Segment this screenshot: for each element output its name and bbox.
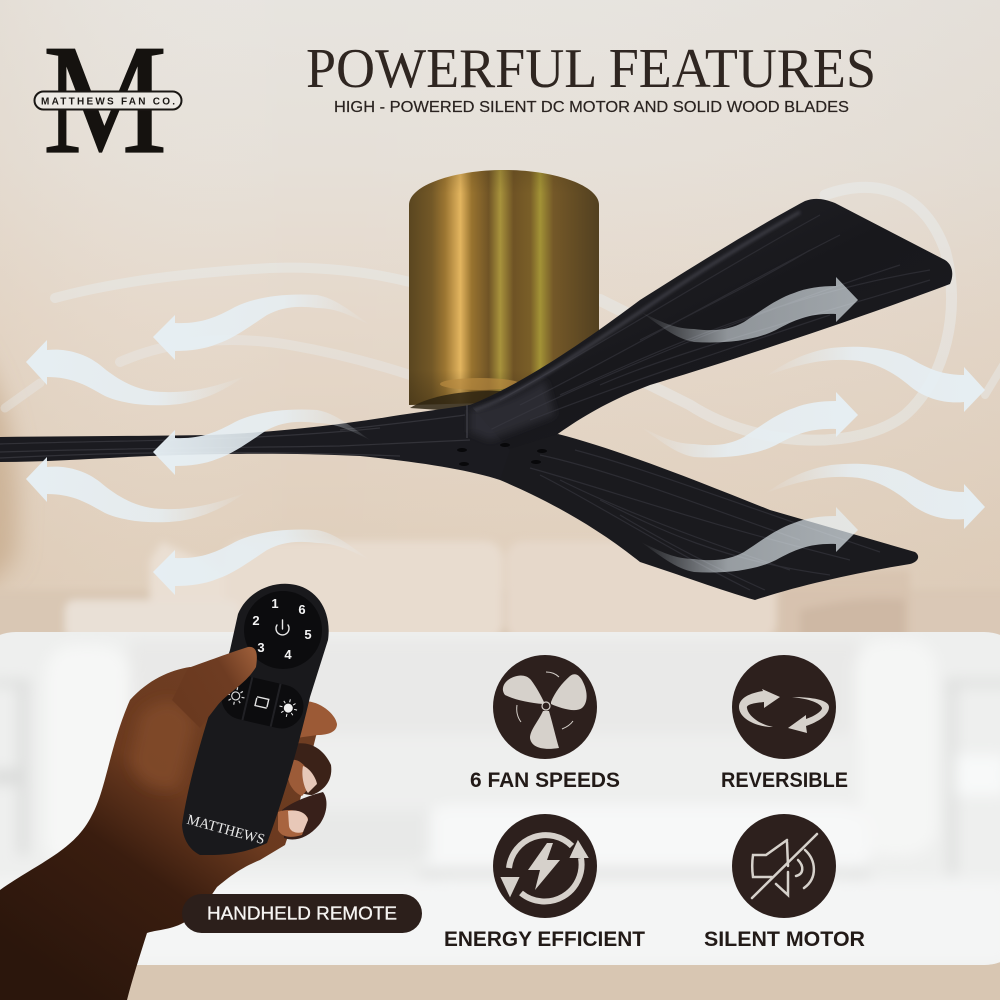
label: SILENT MOTOR <box>704 927 865 951</box>
index finger <box>296 701 337 738</box>
arrow: centre-left over blade <box>153 410 370 475</box>
airflow arrows: left side <box>26 294 370 595</box>
logo: Matthews Fan Co. monogram: MATTHEWS FAN CO. <box>41 96 175 108</box>
label: ENERGY EFFICIENT <box>444 927 645 951</box>
airflow arrows: right side <box>641 277 985 572</box>
dial <box>244 591 322 669</box>
button icon: reverse <box>255 697 269 708</box>
blade: left <box>0 405 510 480</box>
dial numbers: 3 <box>257 640 265 655</box>
arrow: centre-right <box>641 392 858 458</box>
subtitle: HIGH - POWERED SILENT DC MOTOR AND SOLID WOOD BLADES <box>334 99 849 116</box>
dial numbers: 5 <box>304 627 312 642</box>
label: REVERSIBLE <box>721 768 848 792</box>
middle finger <box>286 743 331 795</box>
hand holding remote <box>0 667 337 1000</box>
dial numbers: 1 <box>271 596 279 611</box>
ring finger tip and nail <box>278 810 308 837</box>
arrow: upper centre-left <box>153 294 370 360</box>
panel: features backdrop <box>0 632 1000 965</box>
pill: handheld remote <box>182 894 422 933</box>
dial numbers: 2 <box>252 613 260 628</box>
dial numbers <box>252 596 312 662</box>
icon: muted speaker <box>732 814 836 918</box>
feature: silent motor <box>704 814 865 951</box>
logo: Matthews Fan Co. monogram: M <box>43 12 167 186</box>
arrow: on lower blade <box>641 507 858 572</box>
remote control <box>182 584 329 855</box>
ceiling fan <box>0 170 952 600</box>
dial numbers: 6 <box>298 602 306 617</box>
middle finger tip and nail <box>287 760 317 796</box>
background: floor strip <box>0 950 1000 1000</box>
icon: fan <box>493 655 597 759</box>
dial numbers: 4 <box>284 647 292 662</box>
arrow: far left lower <box>26 457 245 522</box>
arrow: far right lower <box>766 464 985 529</box>
button icon: light on <box>278 697 299 719</box>
motor canopy: brushed brass <box>409 170 599 405</box>
feature: energy efficient <box>444 814 645 951</box>
arrow: on upper blade <box>641 277 858 342</box>
pill: handheld remote: HANDHELD REMOTE <box>207 902 397 924</box>
arrow: far left upper <box>26 340 245 405</box>
faint air swirls behind fan <box>5 187 1000 440</box>
icon: bolt in cycle <box>493 814 597 918</box>
blade: upper right <box>400 199 952 470</box>
arm and palm <box>0 667 320 1000</box>
button icon: light <box>225 685 246 707</box>
knuckle highlight <box>130 701 195 789</box>
icon: rotation arrows <box>732 655 836 759</box>
remote body <box>182 584 329 855</box>
function buttons <box>217 671 308 733</box>
feature: reversible <box>721 655 848 792</box>
ring finger <box>282 792 326 839</box>
feature: 6 fan speeds <box>470 655 620 792</box>
title: POWERFUL FEATURES <box>306 38 876 100</box>
arrow: lower centre-left <box>153 530 370 595</box>
blade: lower right <box>500 434 918 600</box>
label: 6 FAN SPEEDS <box>470 768 620 792</box>
power icon <box>276 620 289 635</box>
hub joint and mounting holes <box>457 380 555 466</box>
thumb over remote <box>172 647 257 728</box>
arrow: far right upper <box>766 347 985 412</box>
background: blurred sofa cushions <box>0 541 1000 650</box>
canopy base shadow <box>410 378 520 412</box>
remote brand wordmark: MATTHEWS <box>185 812 266 848</box>
